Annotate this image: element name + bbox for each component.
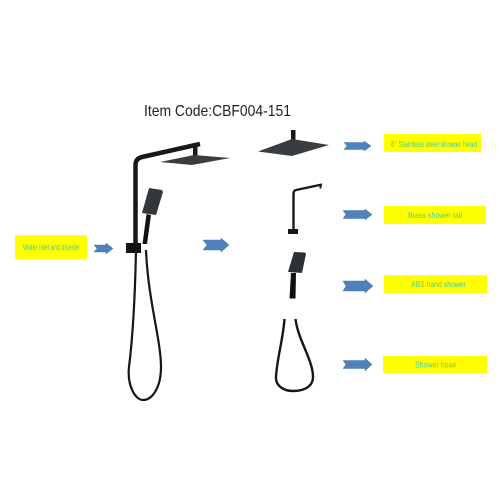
- overhead shower head: [160, 155, 230, 165]
- part: shower rail: [288, 184, 322, 234]
- label: hose: [383, 356, 487, 373]
- hose: [129, 250, 161, 400]
- hand shower head: [142, 188, 163, 215]
- arrow: hand shower: [343, 279, 373, 293]
- arrow: hose: [343, 358, 372, 371]
- arrow: inlet to assembly: [94, 243, 113, 254]
- title: Item Code:CBF004-151: [144, 103, 291, 120]
- label: hand shower: [384, 275, 487, 293]
- part: hose: [276, 319, 313, 391]
- arrow: shower rail: [343, 209, 372, 220]
- rail: [136, 144, 200, 243]
- label: shower rail: [384, 206, 486, 224]
- label: shower head: 8" Stainless steel shower head: [391, 140, 477, 149]
- part: hand shower: [288, 252, 306, 298]
- assembled shower set: [126, 144, 230, 400]
- part: shower head: [258, 130, 329, 156]
- label: water inlet and diverter: Water inlet and diverter: [23, 243, 80, 252]
- label: shower head: [384, 134, 481, 152]
- arrow: shower head: [344, 141, 371, 151]
- bracket diverter: [126, 243, 141, 253]
- arrow: assembly to parts: [203, 238, 229, 252]
- hand shower handle: [142, 214, 151, 244]
- label: hose: Shower hose: [415, 360, 456, 370]
- label: shower rail: Brass shower rail: [408, 211, 462, 220]
- label: hand shower: ABS hand shower: [411, 280, 466, 289]
- head connector: [193, 144, 198, 156]
- label: water inlet and diverter: [15, 235, 87, 259]
